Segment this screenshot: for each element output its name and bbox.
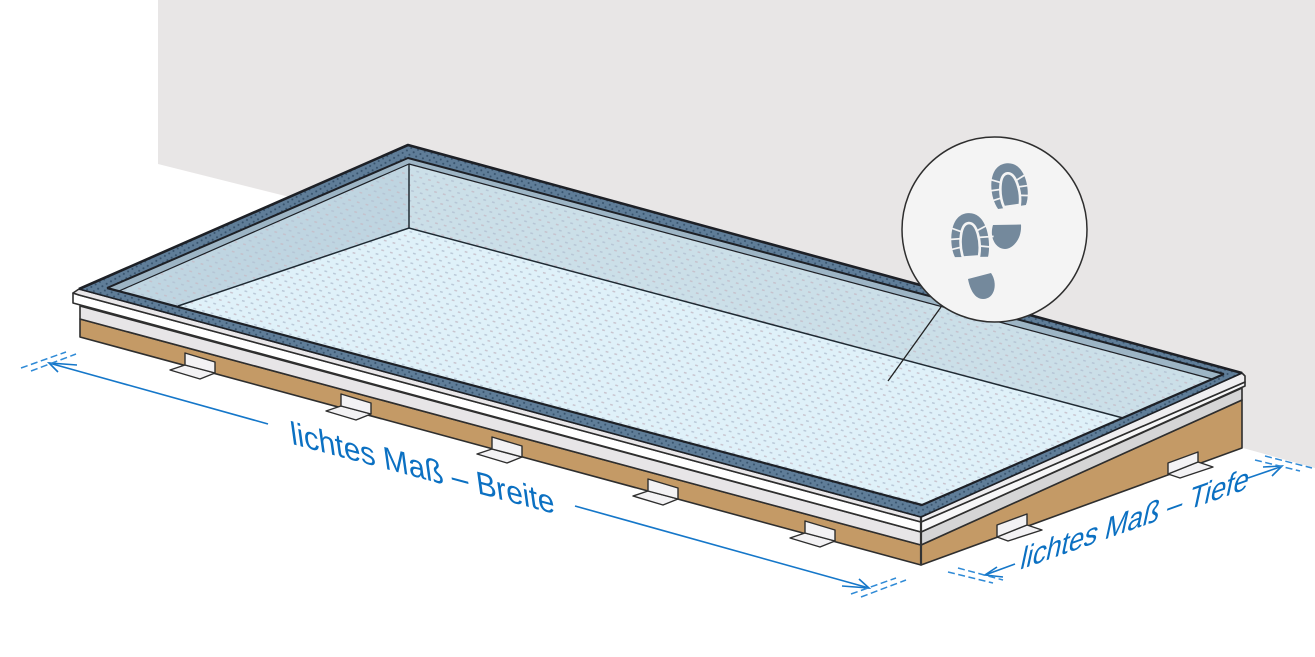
bracket 3: [477, 437, 522, 463]
bracket 7: right side: [1168, 452, 1213, 478]
frame cap: front white band: [73, 293, 921, 532]
flashing: right grey band: [921, 388, 1242, 545]
mounting brackets: front: [170, 353, 1213, 547]
Tiefe dashed end marks: [948, 456, 1312, 583]
frame surface: [79, 145, 1242, 517]
frame cap: right white band: [921, 382, 1245, 532]
frame dot texture: [79, 145, 1242, 517]
frame cap: right top strip: [921, 373, 1245, 522]
bracket 4: [633, 479, 678, 505]
dimension: Tiefe: [948, 456, 1312, 583]
icon: right sole: [982, 160, 1036, 210]
bracket 5: [790, 521, 835, 547]
building wall: [158, 0, 1315, 468]
bracket 2: [326, 394, 371, 420]
bracket 1: [170, 353, 215, 379]
dimension: Breite: [21, 352, 906, 597]
light inner strip: [107, 158, 1224, 379]
glass: back wall: [409, 160, 1226, 418]
icon: left sole: [944, 211, 995, 260]
icon: footprints: [944, 160, 1036, 299]
timber upstand: front side: [80, 319, 921, 565]
glass edge lines: [178, 164, 1123, 418]
icon: left heel: [968, 273, 995, 299]
frame cap: front top strip: [73, 289, 921, 522]
icon: right heel: [992, 224, 1021, 249]
Tiefe arrow lines: [985, 466, 1282, 577]
callout circle: [902, 137, 1087, 322]
corner edge: [920, 517, 922, 565]
callout: walkable surface: [888, 137, 1087, 381]
flashing: front grey band: [80, 306, 921, 545]
dark blue frame: [79, 145, 1242, 517]
Breite dashed end marks: [21, 352, 906, 597]
upstand and frame: [73, 289, 1245, 565]
bracket 6: right side: [997, 514, 1042, 541]
glass dot texture: [105, 160, 1226, 506]
glass: left wall: [105, 160, 409, 307]
Breite label: lichtes Maß – Breite: [288, 414, 557, 521]
Tiefe label: lichtes Maß – Tiefe: [1018, 460, 1253, 577]
Breite arrow lines: [49, 363, 869, 588]
frame outlines: [79, 145, 1242, 517]
callout leader line: [888, 307, 941, 381]
glass: floor: [178, 228, 1123, 506]
glazing: [105, 160, 1226, 506]
timber upstand: right side: [921, 400, 1242, 565]
